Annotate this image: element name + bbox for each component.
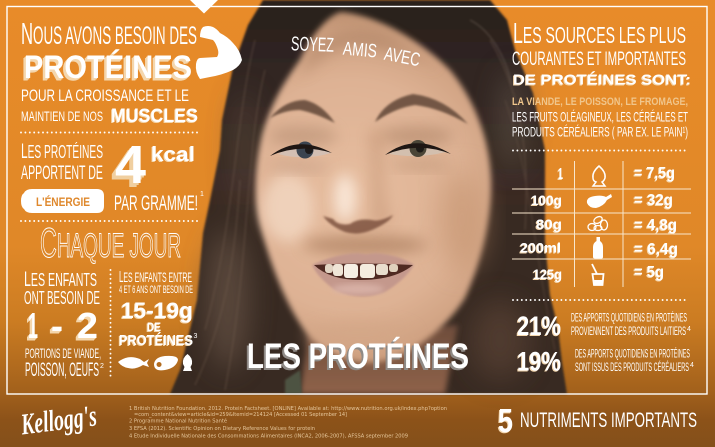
footnote mark 2: 2: [100, 363, 104, 370]
chin shade: [305, 321, 415, 349]
text: les protéines apportent de: LES PROTÉINES: [21, 140, 103, 163]
neck: [300, 325, 458, 394]
row 4: milk bottle: = 6,4g: [634, 241, 678, 258]
shirt: [285, 370, 302, 394]
heading: de protéines sont: DE PROTÉINES SONT:: [513, 72, 691, 88]
text: produits céréaliers: 4: [690, 362, 694, 369]
row 5: yogurt: = 5g: [634, 264, 664, 281]
footnotes: 4 Etude Individuelle Nationale des Consommations Alimentaires (INCA2, 2006-2007), AFSSA september 2009: [129, 434, 409, 440]
footnotes: =com_content&view=article&id=259&Itemid=214124 [Accessed 01 September 14]: [134, 412, 347, 418]
series tag: 5 nutriments importants: 5: [498, 402, 513, 439]
number: 15-19g: 15-19g: [121, 298, 193, 323]
right cheek shade: [440, 170, 484, 270]
hair strands: [195, 20, 555, 390]
main title: les protéines: LES PROTÉINES: [247, 336, 469, 376]
hair: [170, 0, 567, 394]
stat: 21%: 21%: [517, 311, 561, 341]
face: [256, 12, 491, 363]
text: produits céréaliers: [575, 346, 694, 374]
text: apportent de: APPORTENT DE: [21, 163, 103, 184]
footnote mark 1: 1: [200, 191, 204, 198]
text: pour la croissance: POUR LA CROISSANCE ET LE: [21, 86, 189, 105]
forehead shade: [300, 29, 440, 78]
number: 1 - 2: -: [51, 305, 63, 346]
stat: 19%: 19%: [517, 346, 561, 376]
arched title: soyez amis avec: AVEC: [382, 44, 422, 71]
nose underside: [323, 215, 393, 234]
footnotes: [129, 406, 447, 440]
heading: nous avons besoin des: NOUS AVONS BESOIN DES: [21, 16, 197, 51]
row 3: nuts: [536, 215, 677, 234]
row 4: milk bottle: [520, 237, 678, 258]
eye sockets: [269, 126, 337, 146]
text: produits laitiers: 4: [687, 326, 691, 333]
heading: protéines: PROTÉINES: [24, 49, 192, 85]
under eye shade: [270, 162, 330, 172]
number: 1 - 2: 2: [77, 305, 98, 346]
footnotes: 3 EFSA (2012). Scientific Opinion on Dietary Reference Values for protein: [129, 426, 315, 432]
text: 4 et 6 ans: 4 ET 6 ANS ONT BESOIN DE: [119, 284, 193, 296]
arched title: soyez amis avec: AMIS: [342, 39, 378, 62]
arched title: soyez amis avec: [291, 33, 422, 71]
arched title: soyez amis avec: SOYEZ: [291, 33, 334, 57]
panel: right, sources: [512, 18, 691, 150]
table: protein per food: [512, 161, 691, 287]
right eyebrow: [375, 94, 468, 124]
big number 4: 4: [115, 135, 146, 195]
hair lighter zones: [208, 70, 530, 380]
row 5: yogurt: 125g: [533, 266, 562, 282]
photo: smiling girl: [170, 0, 567, 394]
left cheek light: [262, 174, 314, 242]
row 3: nuts: 80g: [536, 216, 562, 232]
footnotes: 2 Programme National Nutrition Santé: [129, 418, 228, 424]
panel: left, protein need: [21, 16, 242, 221]
text: muscles: MUSCLES: [111, 106, 198, 127]
panel: left, every day: PORTIONS DE VIANDE,: [25, 345, 101, 361]
pill: l'énergie: L'ÉNERGIE: [36, 194, 90, 209]
text: kcal: kcal: [151, 144, 195, 166]
row 5: yogurt: [533, 264, 664, 285]
row 1: egg: 1: [558, 166, 563, 183]
mouth and teeth: [314, 264, 413, 280]
logo: kellogg's: Kellogg's: [18, 399, 99, 441]
right eye: [385, 140, 451, 157]
moustache shade: [303, 235, 427, 255]
nose highlight: [334, 174, 356, 222]
text: produits laitiers: [571, 310, 691, 338]
row 1: egg: [558, 165, 675, 186]
row 1: egg: = 7,5g: [634, 165, 675, 182]
icon: fish: [118, 357, 149, 369]
icon: egg in cup: [183, 354, 192, 371]
text: les enfants entre: LES ENFANTS ENTRE: [119, 269, 192, 286]
text: maintien de nos: MAINTIEN DE NOS: [21, 108, 103, 124]
left eyebrow: [270, 100, 335, 123]
lips: [312, 253, 414, 297]
nose side shade: [368, 130, 392, 225]
top notch triangle: [190, 0, 218, 14]
series tag: 5 nutriments importants: [498, 402, 697, 439]
text: ont besoin de: ONT BESOIN DE: [24, 288, 100, 308]
icon: steak: [154, 356, 178, 370]
left eye: [270, 142, 332, 158]
icon: flexed arm: [196, 26, 242, 79]
text: par gramme: PAR GRAMME!: [114, 192, 198, 215]
row 4: milk bottle: 200ml: [520, 240, 561, 256]
text: de: DE: [147, 320, 161, 334]
row 2: chicken: [531, 192, 673, 209]
row 2: chicken: 100g: [531, 192, 562, 208]
row 2: chicken: = 32g: [634, 192, 673, 209]
text: les enfants ont besoin de: LES ENFANTS: [24, 268, 97, 291]
panel: left, every day: POISSON, OEUFS: [25, 360, 99, 381]
panel: left, every day: [24, 219, 198, 381]
panel: right, daily intake statistics: [513, 300, 694, 376]
heading: chaque jour: CHAQUE JOUR: [40, 219, 181, 266]
row 3: nuts: = 4,8g: [634, 217, 677, 234]
number: 1 - 2: [28, 305, 98, 346]
lower lip highlight: [332, 284, 384, 294]
text: protéines: PROTÉINES: [119, 332, 193, 349]
number: 1 - 2: 1: [28, 305, 38, 346]
pill: l'énergie: [21, 189, 104, 213]
footnotes: 1 British Nutrition Foundation. 2012. Protein Factsheet. [ONLINE] Available at: http://www.nutrition.org.uk/index.php?option: [129, 406, 447, 412]
footnote mark 3: 3: [194, 333, 198, 340]
